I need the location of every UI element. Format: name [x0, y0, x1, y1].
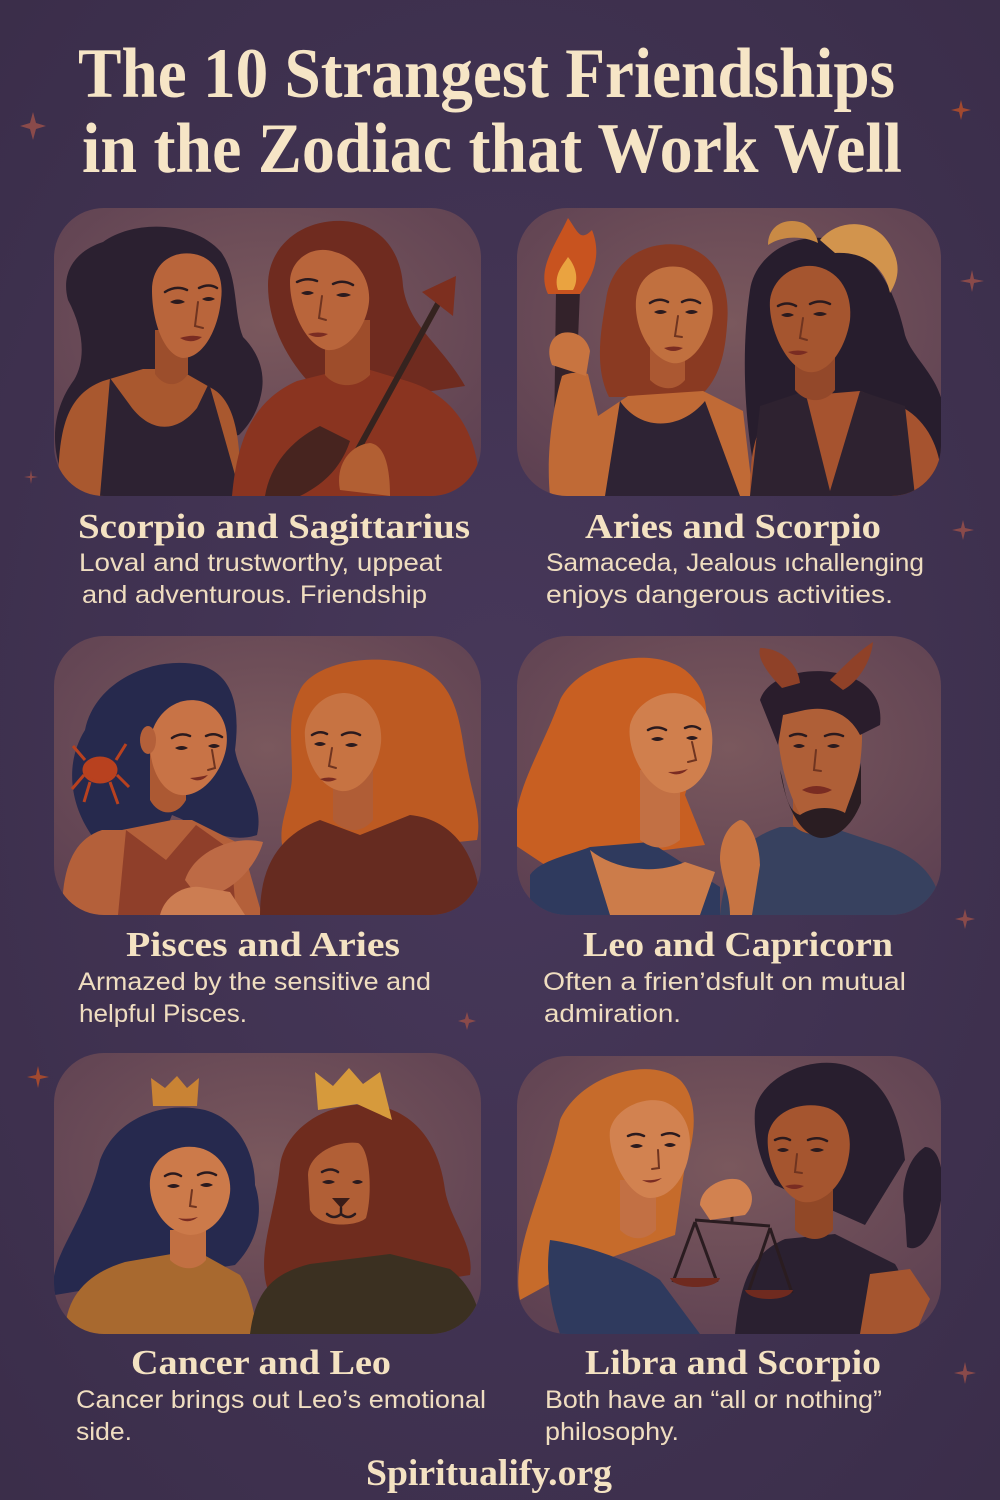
figure: Leo woman: [514, 658, 720, 915]
heading: Pisces and Aries: Pisces and Aries: [126, 925, 400, 964]
text block: Aries and Scorpio: enjoys dangerous activities.: [546, 581, 893, 609]
figure: Aries woman: [260, 660, 481, 915]
text block: Cancer and Leo: side.: [76, 1418, 132, 1446]
figure: Cancer woman with crown: [53, 1076, 259, 1334]
text block: Libra and Scorpio: [545, 1386, 882, 1446]
figure: Scorpio woman: [735, 1063, 942, 1334]
figure: Scorpio woman: [55, 227, 263, 496]
panel: Leo and Capricorn illustration: [514, 636, 942, 915]
title: in the Zodiac that Work Well: [82, 110, 902, 188]
text block: Pisces and Aries: [78, 968, 431, 1028]
heading: Leo and Capricorn: Leo and Capricorn: [583, 925, 893, 964]
icon: fish in hands: [185, 840, 263, 891]
text block: Cancer and Leo: [76, 1386, 486, 1446]
text block: Leo and Capricorn: admiration.: [544, 1000, 681, 1028]
text block: Libra and Scorpio: Both have an “all or nothing”: [545, 1386, 882, 1414]
text block: Scorpio and Sagittarius: and adventurous. Friendship: [82, 581, 427, 609]
text block: Aries and Scorpio: Samaceda, Jealous ıchallenging: [546, 549, 924, 577]
figure: Libra woman: [518, 1069, 700, 1334]
text block: Leo and Capricorn: Often a frien’dsfult on mutual: [543, 968, 906, 996]
panel: Aries and Scorpio illustration: [517, 208, 945, 496]
heading: Scorpio and Sagittarius: Scorpio and Sagittarius: [78, 507, 470, 546]
figure: Scorpio woman with ram horns: [745, 221, 945, 496]
panel: Scorpio and Sagittarius illustration: [54, 208, 481, 496]
panel: Pisces and Aries illustration: [54, 636, 481, 915]
text block: Pisces and Aries: Armazed by the sensitive and: [78, 968, 431, 996]
figure: Leo lion: [250, 1068, 481, 1334]
text block: Scorpio and Sagittarius: [79, 549, 442, 609]
title: [78, 35, 902, 188]
text block: Libra and Scorpio: philosophy.: [545, 1418, 679, 1446]
heading: Cancer and Leo: Cancer and Leo: [131, 1343, 391, 1382]
icon: crab: [72, 744, 129, 804]
text block: Aries and Scorpio: [546, 549, 924, 609]
icon: arrow: [355, 276, 456, 455]
heading: Aries and Scorpio: Aries and Scorpio: [585, 507, 881, 546]
text block: Leo and Capricorn: [543, 968, 906, 1028]
icon: scales: [670, 1179, 793, 1299]
title: The 10 Strangest Friendships: [78, 35, 895, 113]
figure: Aries woman: [549, 244, 753, 496]
footer: Spiritualify.org: Spiritualify.org: [366, 1453, 612, 1494]
figure: Capricorn man: [720, 642, 942, 915]
text block: Pisces and Aries: helpful Pisces.: [79, 1000, 247, 1028]
panel: Cancer and Leo illustration: [53, 1053, 481, 1334]
text block: Cancer and Leo: Cancer brings out Leo’s emotional: [76, 1386, 486, 1414]
text block: Scorpio and Sagittarius: Loval and trustworthy, uppeat: [79, 549, 442, 577]
heading: Libra and Scorpio: Libra and Scorpio: [585, 1343, 881, 1382]
panel: Libra and Scorpio illustration: [517, 1056, 942, 1334]
icon: torch: [544, 218, 596, 409]
figure: Pisces woman: [62, 663, 262, 915]
figure: Sagittarius woman: [232, 221, 480, 496]
